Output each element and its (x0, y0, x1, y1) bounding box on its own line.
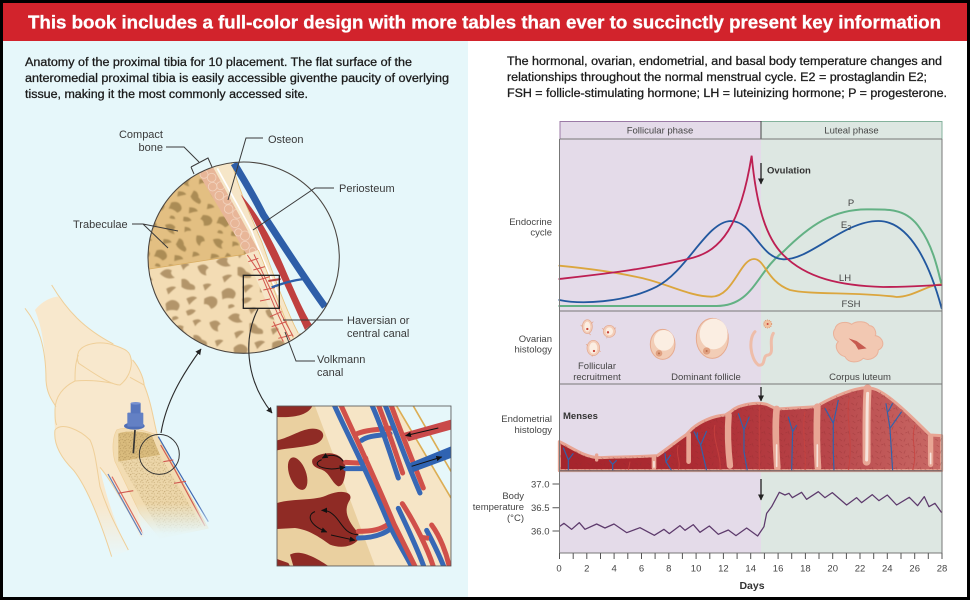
row label: Ovarian histology: Ovarian (519, 334, 552, 345)
label: Compact bone (119, 129, 212, 174)
title banner: This book includes a full-color design with more tables than ever to succinctly present key information (28, 12, 941, 32)
temperature y labels: 36.5 (531, 503, 550, 514)
knee illustration with intraosseous needle (25, 285, 223, 557)
label: Volkmann canal (285, 332, 365, 379)
label: Menses: Menses (563, 411, 598, 422)
label: Dominant follicle: Dominant follicle (671, 372, 741, 383)
temperature y ticks (552, 484, 560, 531)
row label: Body temperature: temperature (473, 502, 524, 513)
left caption text: anteromedial proximal tibia is easily accessible giventhe paucity of overlying (25, 71, 449, 85)
x axis: days: 26 (909, 564, 920, 574)
temperature y labels: 37.0 (531, 480, 550, 490)
label: Osteon (228, 134, 303, 200)
arrow: tibia to bone cross-section (161, 349, 201, 433)
label: Haversian or central canal (283, 315, 410, 340)
hormone labels: 2 (847, 225, 851, 232)
right caption text: The hormonal, ovarian, endometrial, and basal body temperature changes and (507, 54, 942, 68)
blue vein (234, 163, 325, 307)
x axis: days: 12 (718, 564, 729, 574)
arrow: bone box to enlarged inset (249, 309, 272, 413)
label: Trabeculae: Trabeculae (73, 219, 128, 231)
ovulation marker: Ovulation (767, 166, 811, 176)
phase bar: Luteal phase (824, 126, 879, 136)
row label: Ovarian histology: histology (514, 344, 552, 356)
chart: menstrual cycle panel backgrounds (560, 139, 942, 553)
ovarian histology illustrations (581, 318, 883, 365)
hormone labels: LH (839, 273, 851, 284)
x axis: days: Days (739, 580, 765, 592)
phase bar (560, 121, 942, 139)
phase bar: Follicular phase (627, 126, 693, 136)
x axis: days: 24 (882, 564, 893, 574)
x axis: days: 20 (827, 564, 838, 574)
hormone labels (839, 198, 861, 310)
canal network (247, 254, 293, 342)
x axis: days: 2 (584, 564, 589, 574)
x axis: days: 4 (611, 564, 617, 574)
vessels (333, 403, 450, 570)
temperature line (559, 492, 942, 536)
flow arrows (310, 428, 442, 540)
label: Follicular recruitment: recruitment (573, 372, 621, 383)
x axis: days: 10 (691, 564, 701, 574)
arrow: ovulation on temperature (760, 479, 762, 500)
x axis: days: 14 (745, 564, 756, 574)
chart frame lines (560, 139, 942, 559)
label: Haversian or central canal: central canal (347, 328, 409, 340)
temperature y labels (531, 480, 550, 538)
x axis: days: 28 (937, 564, 947, 574)
row label: Body temperature: (°C) (507, 513, 524, 524)
temperature y labels: 36.0 (531, 526, 550, 538)
magnifier circle on tibia (139, 434, 179, 474)
compact bone osteon band (198, 168, 258, 254)
bone shaft cut-away (113, 428, 208, 538)
endometrial histology illustration (559, 388, 942, 471)
right caption text: FSH = follicle-stimulating hormone; LH = luteinizing hormone; P = progesterone. (507, 86, 947, 100)
left caption text: Anatomy of the proximal tibia for 10 placement. The flat surface of the (25, 55, 412, 69)
x axis: days: 16 (773, 564, 783, 574)
label: Compact bone: Compact (119, 129, 163, 141)
row label: Endometrial histology: histology (514, 425, 552, 436)
row label: Endocrine cycle: cycle (530, 228, 552, 238)
label: Osteon: Osteon (268, 134, 303, 146)
label: Follicular recruitment: Follicular (578, 361, 616, 372)
x axis: days (556, 553, 947, 592)
right caption text: relationships throughout the normal menstrual cycle. E2 = prostaglandin E2; (507, 70, 927, 84)
x axis: days: 8 (666, 564, 671, 574)
enlarged inset: vessels in bone (277, 403, 451, 570)
row label: Endometrial histology: Endometrial (501, 414, 552, 425)
red artery (241, 194, 312, 330)
chart: endocrine cycle hormone curves (559, 156, 942, 308)
bone cross-section circle (143, 155, 343, 354)
x axis: days: 6 (639, 564, 644, 574)
hormone labels: E (841, 220, 847, 231)
chart: body temperature (531, 480, 942, 538)
label: Trabeculae (73, 219, 178, 248)
panel: left light blue background (3, 41, 468, 597)
row label: Endocrine cycle: Endocrine (509, 217, 552, 228)
x axis: days: 22 (855, 564, 865, 574)
x axis: days: 18 (800, 564, 811, 574)
tibia vessels (108, 437, 208, 535)
hormone labels: P (848, 198, 854, 209)
periosteum and outer cortex (213, 161, 300, 347)
label: Corpus luteum: Corpus luteum (829, 372, 891, 383)
label: Periosteum: Periosteum (339, 183, 395, 195)
hormone labels: FSH (842, 299, 861, 310)
label: Compact bone: bone (139, 142, 163, 154)
left caption text: tissue, making it the most commonly accessed site. (25, 87, 308, 101)
title banner (3, 3, 967, 41)
panel: right white background (468, 41, 967, 597)
ovulation marker (761, 163, 811, 184)
arrow: ovulation on endometrium (760, 387, 762, 401)
row label: Body temperature: Body (502, 491, 524, 502)
label: Periosteum (253, 183, 395, 230)
icon: IO needle (124, 402, 145, 453)
label: Haversian or central canal: Haversian or (347, 315, 410, 327)
x axis: days: 0 (556, 564, 562, 574)
label: Volkmann canal: canal (317, 367, 343, 379)
label: Volkmann canal: Volkmann (317, 354, 365, 366)
